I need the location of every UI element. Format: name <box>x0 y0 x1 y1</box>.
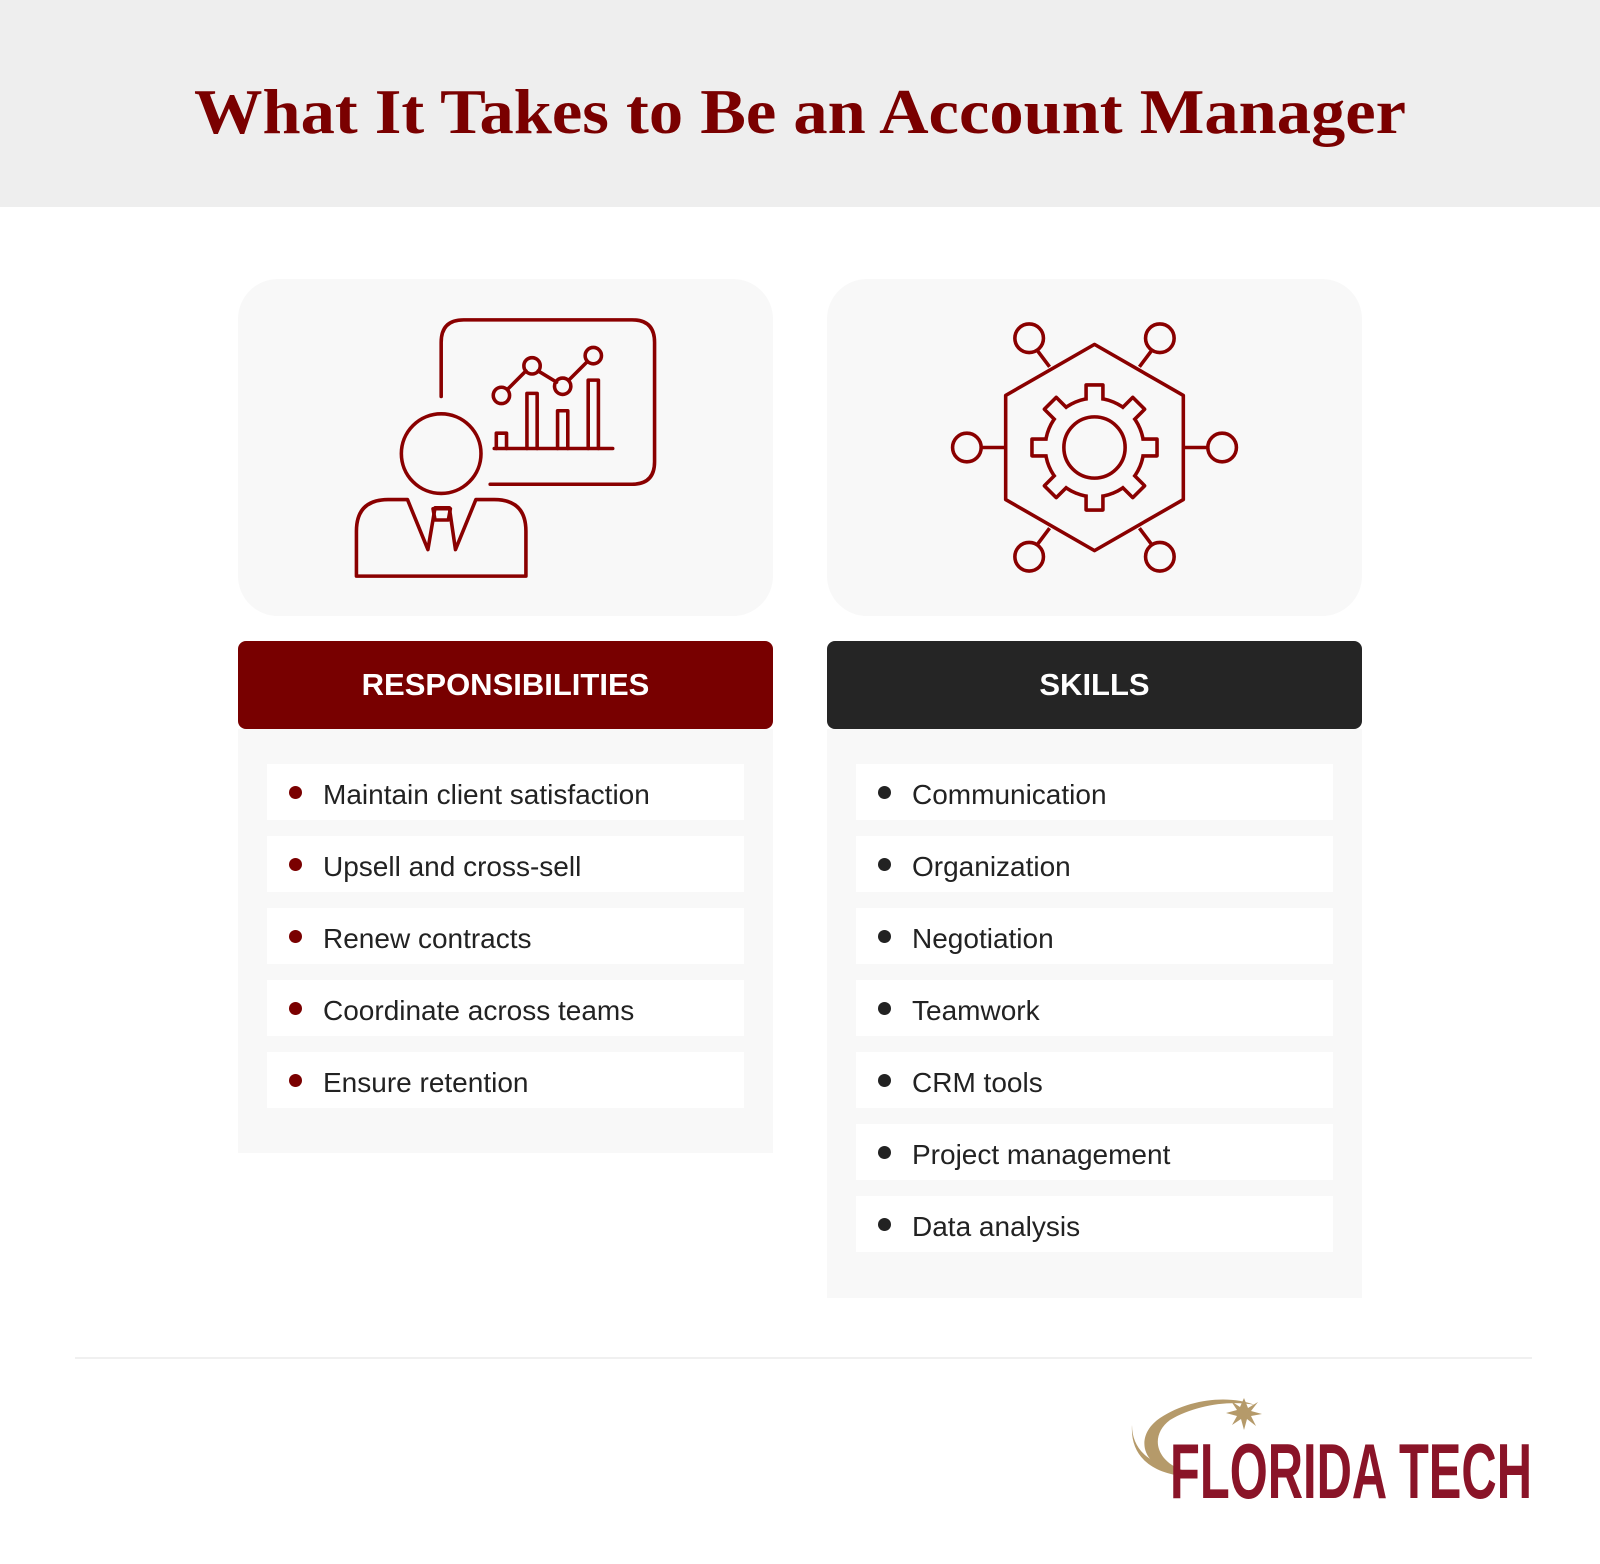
logo: Florida Tech <box>1132 1398 1532 1515</box>
item <box>267 836 744 892</box>
item: Ensure retention <box>323 1066 528 1098</box>
item: Coordinate across teams <box>323 994 634 1026</box>
item: Renew contracts <box>323 922 532 954</box>
item <box>267 764 744 820</box>
header: responsibilities <box>238 641 773 729</box>
item <box>856 836 1333 892</box>
panel: skills icon card <box>827 279 1362 616</box>
item: Communication <box>912 778 1107 810</box>
item <box>267 980 744 1036</box>
item: Upsell and cross-sell <box>323 850 581 882</box>
icon: gear network <box>950 322 1238 573</box>
header: skills: SKILLS <box>1039 667 1150 702</box>
header band <box>0 0 1600 207</box>
item <box>267 908 744 964</box>
item <box>856 764 1333 820</box>
title: What It Takes to Be an Account Manager <box>194 76 1406 147</box>
panel: responsibilities icon card <box>238 279 773 616</box>
item: Organization <box>912 850 1071 882</box>
item: Project management <box>912 1138 1170 1170</box>
item: Teamwork <box>912 994 1040 1026</box>
panel: responsibilities list <box>238 729 773 1153</box>
item: Data analysis <box>912 1210 1080 1242</box>
header: skills <box>827 641 1362 729</box>
item <box>856 1124 1333 1180</box>
item: CRM tools <box>912 1066 1043 1098</box>
item <box>856 908 1333 964</box>
item: Maintain client satisfaction <box>323 778 650 810</box>
item <box>856 980 1333 1036</box>
icon: presenter with chart <box>354 318 656 578</box>
item <box>856 1196 1333 1252</box>
panel: skills list <box>827 729 1362 1298</box>
header: responsibilities: RESPONSIBILITIES <box>362 667 649 702</box>
item <box>267 1052 744 1108</box>
item <box>856 1052 1333 1108</box>
item: Negotiation <box>912 922 1054 954</box>
